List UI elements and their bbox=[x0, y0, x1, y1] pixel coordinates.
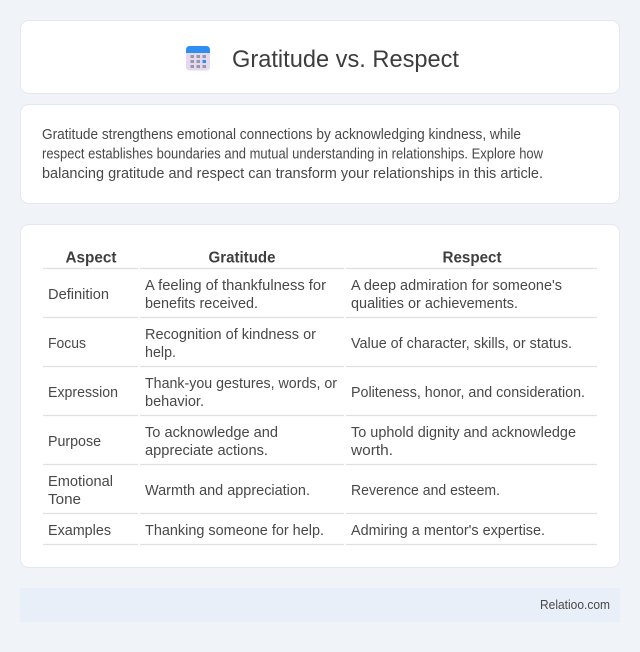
table row: Definition: Definition bbox=[48, 286, 109, 303]
table row: Expression bbox=[48, 375, 585, 410]
panel: title card bbox=[20, 20, 620, 94]
table row: Purpose bbox=[48, 424, 576, 459]
table row: Focus: Focus bbox=[48, 335, 86, 352]
table header: Aspect bbox=[66, 250, 117, 266]
text block: introduction: Gratitude strengthens emotional connections by acknowledging kindness, while bbox=[42, 126, 521, 143]
table row: Examples: Thanking someone for help. bbox=[145, 522, 324, 539]
table row: Focus: Recognition of kindness or bbox=[145, 326, 316, 343]
table row: Expression: Thank-you gestures, words, or bbox=[145, 375, 337, 392]
table header: Respect bbox=[442, 250, 502, 266]
table row: Expression: Expression bbox=[48, 384, 118, 401]
text block: introduction: balancing gratitude and respect can transform your relationships in this article. bbox=[42, 165, 543, 182]
table row: Purpose: To uphold dignity and acknowledge bbox=[351, 424, 576, 441]
table header bbox=[66, 250, 502, 266]
table row: Definition bbox=[48, 277, 562, 312]
table row: Purpose: Purpose bbox=[48, 433, 101, 450]
table row: Emotional Tone bbox=[48, 473, 500, 508]
table row: Emotional Tone: Warmth and appreciation. bbox=[145, 482, 310, 499]
table row: Definition: A feeling of thankfulness for bbox=[145, 277, 326, 294]
table header: Gratitude bbox=[208, 250, 276, 266]
table row: Examples: Admiring a mentor's expertise. bbox=[351, 522, 545, 539]
table row: Focus: Value of character, skills, or status. bbox=[351, 335, 572, 352]
table row: Examples: Examples bbox=[48, 522, 111, 539]
table row: Expression: behavior. bbox=[145, 393, 204, 410]
table row: Definition: qualities or achievements. bbox=[351, 295, 518, 312]
table row: Purpose: To acknowledge and bbox=[145, 424, 278, 441]
text block: introduction: respect establishes boundaries and mutual understanding in relationships. Explore how bbox=[42, 146, 543, 162]
table row: Emotional Tone: Tone bbox=[48, 491, 81, 508]
table row: Purpose: worth. bbox=[350, 442, 393, 459]
table row: Focus: help. bbox=[145, 344, 176, 361]
text block: introduction bbox=[42, 126, 543, 182]
table row: Focus bbox=[48, 326, 572, 361]
panel: introduction bbox=[20, 104, 620, 204]
table row: Emotional Tone: Reverence and esteem. bbox=[351, 482, 500, 499]
table row: Expression: Politeness, honor, and consideration. bbox=[351, 384, 585, 401]
title: Gratitude vs. Respect bbox=[232, 46, 459, 73]
icon: calendar bbox=[186, 46, 210, 70]
table row: Purpose: appreciate actions. bbox=[145, 442, 268, 459]
table row: Emotional Tone: Emotional bbox=[48, 473, 113, 490]
table row: Examples bbox=[48, 522, 545, 539]
footer bbox=[20, 588, 620, 622]
table row: Definition: A deep admiration for someone's bbox=[351, 277, 562, 294]
footer: Relatioo.com bbox=[540, 598, 610, 612]
table row: Definition: benefits received. bbox=[145, 295, 258, 312]
panel: comparison table bbox=[20, 224, 620, 568]
